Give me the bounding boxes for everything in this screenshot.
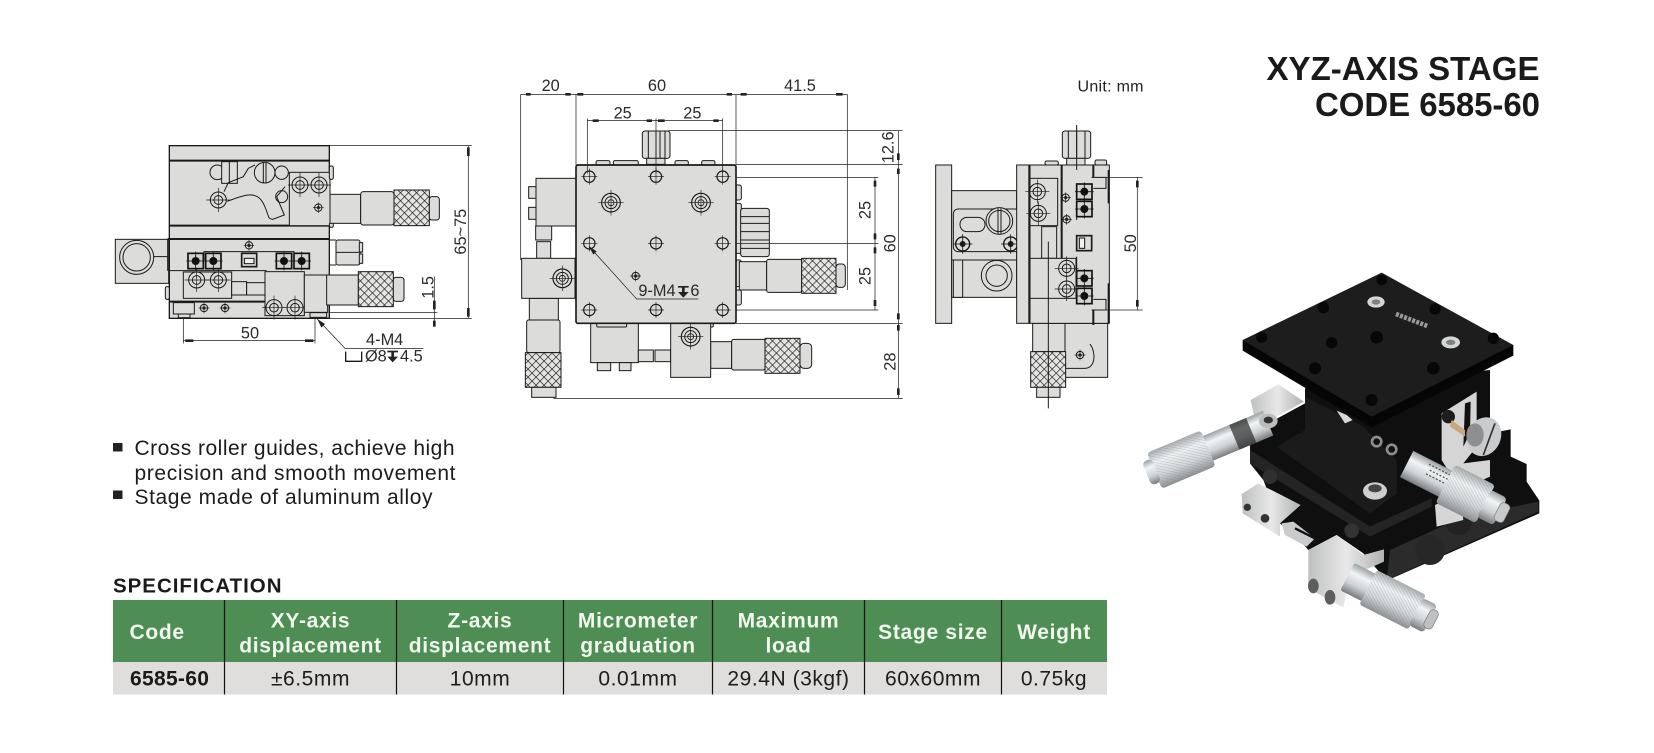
table data row: 0.75kg (1021, 668, 1087, 690)
product photo: XYZ stage (1139, 273, 1539, 639)
drawing: front view (115, 146, 472, 366)
silver plate and thumb screw (1435, 392, 1508, 527)
dimensions (521, 77, 903, 398)
dimensions: 25 (614, 104, 632, 122)
dimensions (1092, 177, 1143, 310)
lower micrometer (327, 272, 404, 307)
top plate with mounting holes (576, 165, 736, 323)
main stage column (1017, 125, 1109, 408)
left micrometer (1139, 384, 1304, 492)
unit note: Unit: mm (1078, 78, 1144, 96)
table header: load (766, 634, 811, 658)
black stage blocks (1250, 370, 1539, 581)
specification heading: SPECIFICATION (113, 574, 282, 598)
dimensions: 25 (856, 267, 874, 285)
bottom micrometer (1339, 559, 1444, 639)
table header: graduation (580, 634, 696, 658)
title: XYZ-AXIS STAGE (1266, 50, 1540, 87)
lower silver blocks (1242, 483, 1384, 607)
dimensions (183, 146, 472, 366)
knob and micrometer (1031, 131, 1108, 397)
table header: displacement (239, 634, 382, 658)
drawing: side view (936, 125, 1143, 408)
dimensions: 28 (881, 353, 899, 371)
dimensions: 6 (690, 282, 699, 300)
right side knob and micrometer (735, 185, 845, 305)
dimensions: 50 (241, 324, 259, 342)
table data row: ±6.5mm (271, 668, 350, 690)
top knob (596, 131, 715, 165)
title (1266, 50, 1540, 123)
bullet 1: precision and smooth movement (134, 462, 456, 485)
dimensions: 65~75 (452, 209, 470, 255)
bullet 1: Cross roller guides, achieve high (134, 437, 454, 460)
top plate (1243, 273, 1513, 427)
table header (113, 600, 1107, 662)
dimensions: 4-M4 (366, 331, 403, 349)
dimensions: 1.5 (419, 276, 437, 299)
table header: Weight (1017, 621, 1091, 644)
bottom clamp and micrometer (591, 323, 812, 377)
table header: Micrometer (578, 610, 698, 632)
dimensions: 60 (881, 234, 899, 252)
table data row: 29.4N (3kgf) (727, 668, 850, 690)
dimensions: 9-M4 (638, 282, 676, 300)
table header: Maximum (738, 610, 839, 632)
dimensions: Ø8 (365, 348, 387, 366)
specification table (113, 600, 1107, 694)
table header: XY-axis (271, 610, 350, 632)
table data row: 0.01mm (598, 668, 678, 690)
table data row: 60x60mm (885, 668, 981, 690)
table header: Stage size (878, 621, 988, 644)
lower stage with square screws (115, 239, 363, 320)
dimensions: 20 (542, 77, 560, 95)
upper micrometer (330, 190, 439, 226)
dimensions: 25 (856, 201, 874, 219)
table header: Code (130, 621, 185, 644)
main body (168, 146, 333, 318)
bullet 2: Stage made of aluminum alloy (134, 486, 433, 509)
table header: displacement (409, 634, 551, 658)
dimensions: 12.6 (880, 131, 898, 163)
mounting plate and bracket (936, 165, 1020, 323)
left clamp and micrometer (522, 178, 576, 397)
bullet 1 (113, 437, 456, 485)
dimensions: 50 (1122, 234, 1140, 252)
drawing: top view (521, 77, 903, 398)
table data row: 10mm (450, 668, 510, 690)
table header: Z-axis (448, 610, 512, 632)
table data row (113, 662, 1107, 694)
dimensions: 60 (648, 77, 666, 95)
title: CODE 6585-60 (1315, 86, 1540, 123)
table data row: 6585-60 (130, 668, 209, 690)
dimensions: 4.5 (400, 348, 423, 366)
feature list (113, 437, 456, 509)
right micrometer (1397, 445, 1516, 534)
dimensions: 25 (683, 104, 701, 122)
dimensions: 41.5 (784, 77, 816, 95)
